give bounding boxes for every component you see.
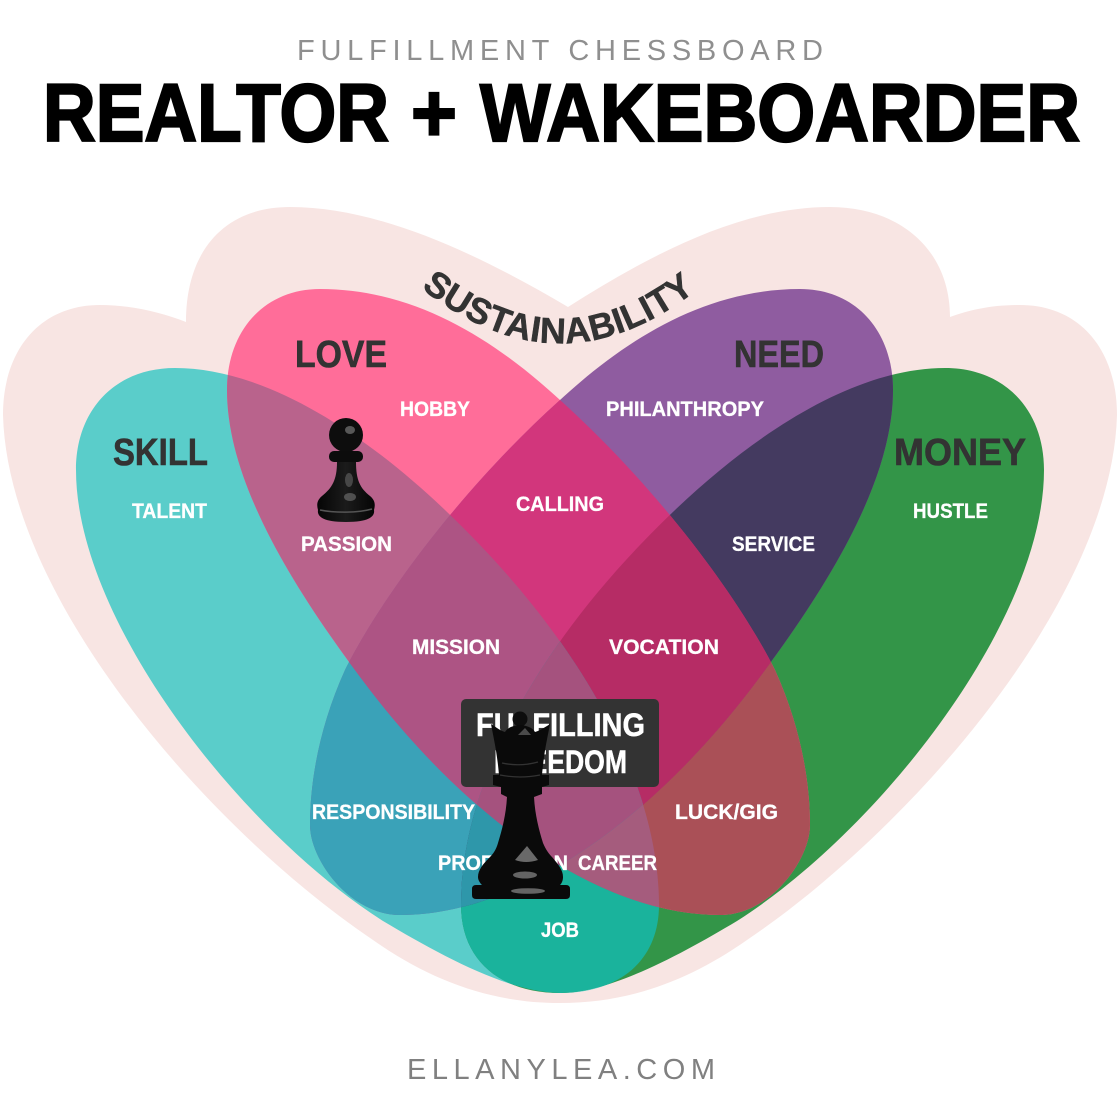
label: profession: PROFESSION: [438, 851, 568, 875]
overlap: service: [461, 374, 893, 908]
heading: skill: SKILL: [113, 432, 208, 474]
label: hobby: HOBBY: [400, 397, 470, 421]
overlap: career: [560, 805, 659, 908]
circle: skill: [76, 368, 659, 993]
label: hustle: HUSTLE: [913, 499, 988, 523]
label: passion: PASSION: [301, 532, 392, 556]
overlap: responsibility: [310, 515, 477, 915]
callout: fulfilling freedom: FREEDOM: [494, 744, 627, 780]
curved label: sustainability: SUSTAINABILITY: [424, 271, 688, 344]
label: luck/gig: LUCK/GIG: [675, 800, 778, 824]
label: job: JOB: [541, 918, 579, 942]
heading: need: NEED: [734, 334, 824, 376]
icon: chess pawn: [317, 418, 375, 522]
callout: fulfilling freedom: [461, 699, 659, 787]
sustainability background shape: [3, 207, 1117, 1003]
label: talent: TALENT: [132, 499, 207, 523]
overlap: mission: [349, 515, 560, 805]
circle: love: [227, 289, 810, 915]
label: calling: CALLING: [516, 492, 604, 516]
title: REALTOR: [43, 68, 389, 159]
overlap: passion: [227, 375, 659, 908]
label: mission: MISSION: [412, 635, 500, 659]
icon: chess queen: [472, 712, 570, 899]
overlap: job: [461, 866, 659, 993]
title: +: [411, 68, 457, 159]
venn diagram: [76, 289, 1044, 993]
label: service: SERVICE: [732, 532, 815, 556]
label: responsibility: RESPONSIBILITY: [312, 800, 475, 824]
overlap: vocation: [560, 515, 771, 804]
subtitle: FULFILLMENT CHESSBOARD: [297, 35, 823, 67]
title: [43, 68, 1080, 159]
heading: love: LOVE: [295, 334, 387, 376]
heading: money: MONEY: [894, 432, 1026, 474]
circle: need: [310, 289, 893, 915]
overlap: center: [477, 642, 643, 866]
overlap: luck/gig: [560, 662, 810, 915]
callout: fulfilling freedom: FULFILLING: [476, 707, 645, 743]
label: philanthropy: PHILANTHROPY: [606, 397, 764, 421]
label: vocation: VOCATION: [609, 635, 719, 659]
overlap: calling: [349, 400, 771, 805]
overlap: profession: [461, 642, 643, 908]
footer url: ELLANYLEA.COM: [407, 1054, 715, 1086]
label: career: CAREER: [578, 851, 657, 875]
circle: money: [461, 368, 1044, 993]
